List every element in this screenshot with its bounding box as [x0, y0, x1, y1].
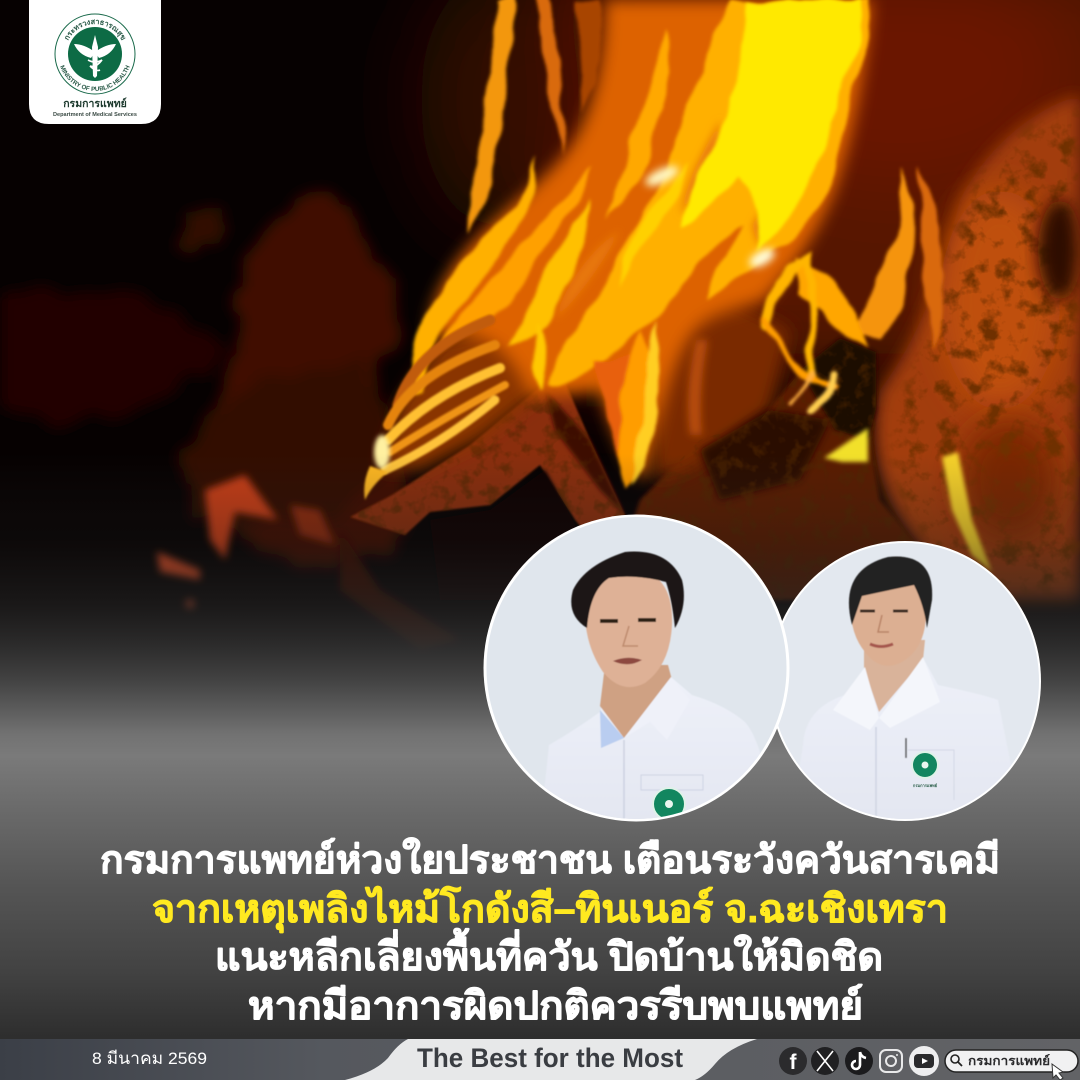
logo emblem — [54, 14, 136, 94]
background photo: burning log fire — [0, 0, 1080, 642]
neck — [864, 640, 925, 712]
eyes and mouth — [600, 620, 656, 621]
pocket — [641, 775, 703, 790]
dark red glow behind flames — [420, 0, 1080, 380]
logo card: Department of Medical Services — [29, 0, 161, 124]
logo label english: Department of Medical Services — [53, 112, 137, 118]
collar — [833, 657, 940, 730]
shirt — [549, 681, 760, 756]
collar — [624, 676, 672, 737]
shirt — [836, 668, 989, 759]
yellow flame body — [545, 0, 870, 387]
headline — [100, 837, 1000, 1028]
lower left embers — [157, 475, 460, 650]
logo label thai: กรมการแพทย์ — [63, 97, 127, 110]
logo emblem: กระทรวงสาธารณสุข — [65, 19, 126, 40]
headline line 3: แนะหลีกเลี่ยงพื้นที่ควัน ปิดบ้านให้มิดชิด — [215, 928, 883, 979]
face — [852, 584, 926, 651]
orange wisps inside flame — [555, 120, 800, 320]
eyes and mouth — [860, 610, 908, 612]
shirt badge — [912, 752, 938, 778]
logo emblem: MINISTRY OF PUBLIC HEALTH — [60, 65, 130, 91]
date: 8 มีนาคม 2569 — [92, 1049, 207, 1068]
headline line 2: จากเหตุเพลิงไหม้โกดังสี–ทินเนอร์ จ.ฉะเชิงเทรา — [152, 886, 948, 933]
icon: youtube — [909, 1046, 939, 1076]
right flame loops — [765, 170, 942, 410]
logs — [350, 300, 960, 600]
hair — [571, 552, 684, 628]
pocket — [908, 750, 954, 800]
orange flame mass — [429, 0, 872, 480]
glowing flame tip — [364, 435, 390, 500]
inner collar — [600, 710, 624, 748]
slogan: The Best for the Most — [417, 1043, 683, 1073]
glow behind ribs — [380, 320, 545, 470]
bark texture — [358, 342, 876, 534]
icon: tiktok — [845, 1047, 873, 1075]
yellow streaks lower right — [824, 428, 992, 572]
portrait: left doctor — [480, 510, 795, 830]
thin flames at top — [470, 0, 600, 240]
search pill — [945, 1050, 1078, 1072]
left blurred rock — [0, 190, 410, 560]
right orange rock — [874, 95, 1080, 600]
twisted rib flames — [385, 320, 505, 470]
flame highlights — [643, 162, 778, 271]
icon: instagram — [880, 1050, 902, 1072]
portrait: right doctor: กรมการแพทย์ — [913, 783, 938, 788]
shirt badge — [653, 788, 685, 820]
neck — [600, 665, 672, 738]
left flame tongues — [409, 160, 658, 492]
search pill: กรมการแพทย์ — [968, 1054, 1050, 1068]
icon: facebook — [779, 1047, 807, 1075]
hair — [849, 557, 932, 628]
face — [585, 568, 672, 687]
icon: facebook: f — [790, 1051, 798, 1074]
bright yellow core — [618, 0, 862, 285]
rock texture — [891, 112, 1080, 588]
icon: mouse cursor — [1052, 1064, 1063, 1080]
footer bar — [0, 1039, 1080, 1080]
headline line 1: กรมการแพทย์ห่วงใยประชาชน เตือนระวังควันสารเคมี — [100, 837, 1000, 882]
headline line 4: หากมีอาการผิดปกติควรรีบพบแพทย์ — [248, 983, 863, 1028]
portrait: right doctor — [777, 541, 1041, 821]
slogan ribbon — [345, 1039, 757, 1080]
icon: X — [811, 1047, 839, 1075]
